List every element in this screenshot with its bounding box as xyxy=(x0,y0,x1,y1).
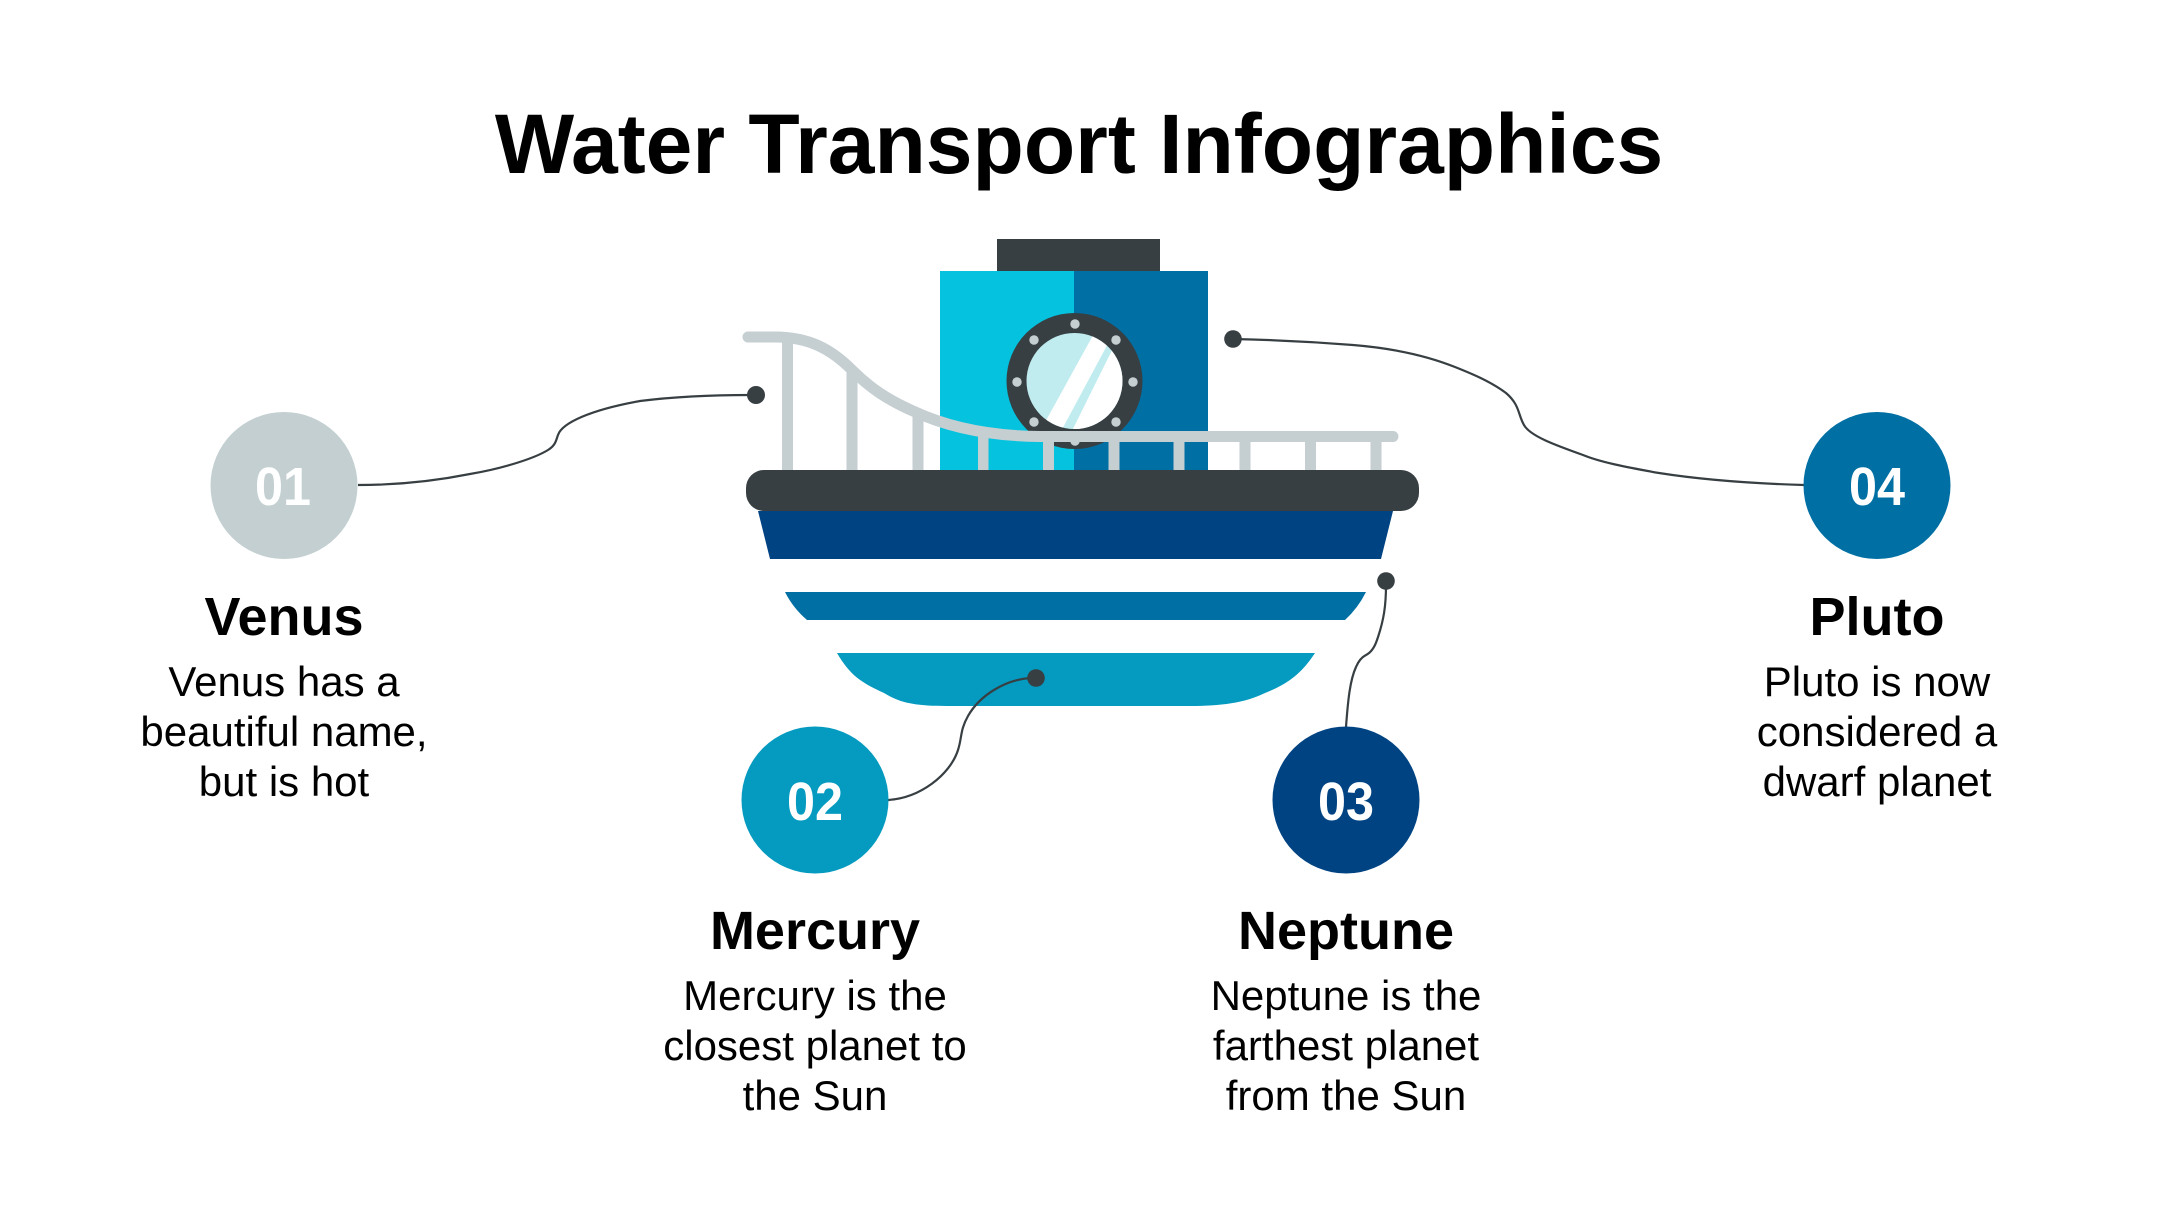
description: Pluto: Pluto is now xyxy=(1764,658,1991,705)
connector: Neptune xyxy=(1346,572,1395,727)
description: Neptune: from the Sun xyxy=(1226,1072,1466,1119)
number badge 02: 02 xyxy=(787,772,843,832)
hull band: navy xyxy=(758,511,1393,559)
heading: Pluto: Pluto xyxy=(1810,587,1944,647)
description: Pluto: considered a xyxy=(1757,708,1998,755)
connector: Venus xyxy=(358,386,765,485)
ship illustration xyxy=(746,239,1419,706)
connector: Mercury xyxy=(888,669,1045,800)
ship cabin xyxy=(940,271,1208,471)
number badge 04: 04 xyxy=(1849,457,1905,517)
description: Venus: but is hot xyxy=(199,758,370,805)
description: Venus: Venus has a xyxy=(168,658,400,705)
title: Water Transport Infographics xyxy=(495,97,1663,191)
number badge 01 xyxy=(210,412,358,559)
number badge 04 xyxy=(1804,412,1950,559)
heading: Venus: Venus xyxy=(204,587,364,647)
hull band: blue xyxy=(785,592,1366,620)
ship funnel xyxy=(997,239,1160,272)
hull band: cyan xyxy=(837,653,1315,706)
panel: Neptune xyxy=(1211,726,1481,1119)
heading: Mercury: Mercury xyxy=(710,901,920,961)
description: Venus: beautiful name, xyxy=(140,708,428,755)
panel: Mercury xyxy=(663,726,967,1119)
icon: porthole xyxy=(1006,313,1142,449)
number badge 01: 01 xyxy=(255,457,311,517)
panel: Pluto xyxy=(1757,412,1998,805)
description: Mercury: closest planet to xyxy=(663,1022,967,1069)
ship deck xyxy=(746,470,1419,511)
description: Neptune: Neptune is the xyxy=(1211,972,1481,1019)
heading: Neptune: Neptune xyxy=(1238,901,1454,961)
number badge 03 xyxy=(1272,726,1420,874)
description: Mercury: the Sun xyxy=(743,1072,887,1119)
connector: Pluto xyxy=(1224,330,1804,485)
description: Mercury: Mercury is the xyxy=(683,972,947,1019)
deck railing xyxy=(748,337,1393,471)
panel: Venus xyxy=(140,412,428,805)
number badge 03: 03 xyxy=(1318,772,1374,832)
description: Pluto: dwarf planet xyxy=(1763,758,1992,805)
description: Neptune: farthest planet xyxy=(1213,1022,1479,1069)
number badge 02 xyxy=(742,726,888,874)
